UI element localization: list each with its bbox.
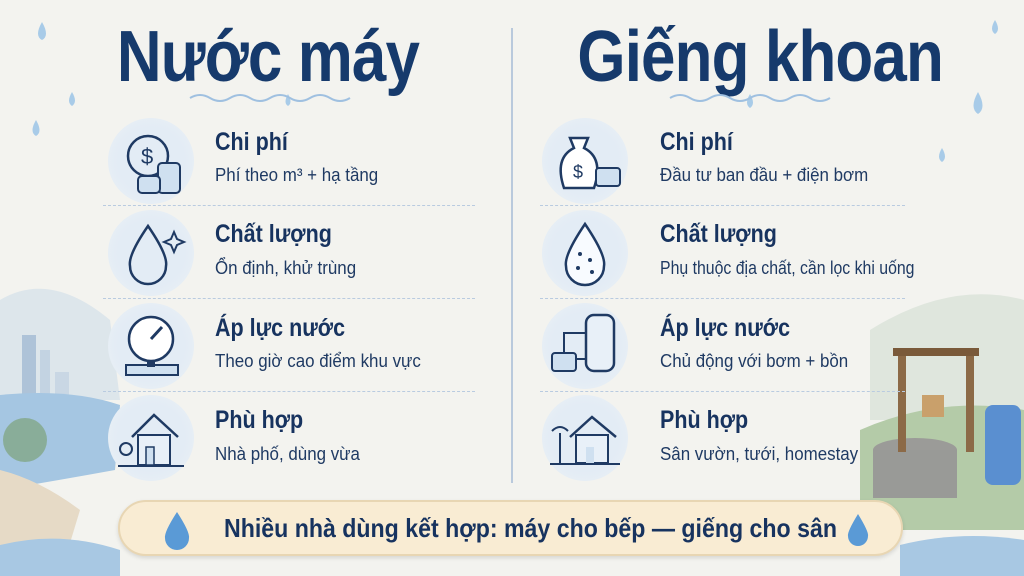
panel: Giếng khoan (542, 118, 914, 481)
text: Chất lượng: Chất lượng (660, 220, 777, 248)
text: Chi phí: Chi phí (660, 128, 733, 156)
title: Giếng khoan: Giếng khoan (577, 17, 943, 97)
panel: Nước máy: Nhà phố, dùng vừa (215, 444, 360, 464)
panel: Giếng khoan: Phụ thuộc địa chất, cần lọc khi uống (660, 258, 914, 278)
text: Áp lực nước: Áp lực nước (215, 314, 345, 342)
icon: gauge (108, 303, 194, 389)
panel: Nước máy (108, 118, 421, 481)
banner text: Nhiều nhà dùng kết hợp: máy cho bếp — giếng cho sân (224, 513, 837, 543)
icon: money bag + pump (542, 118, 628, 204)
icon: coins: $ (141, 144, 153, 169)
icon: pump + tank (542, 303, 628, 389)
text: Chi phí: Chi phí (215, 128, 288, 156)
icon: drop with particles (542, 210, 628, 296)
panel: Giếng khoan: Chủ động với bơm + bồn (660, 351, 848, 371)
text: Phù hợp: Phù hợp (215, 406, 303, 434)
panel: Nước máy: Phí theo m³ + hạ tầng (215, 165, 378, 185)
callout banner (118, 500, 903, 556)
icon: house with palm (542, 395, 628, 481)
icon: coins (108, 118, 194, 204)
text: Áp lực nước: Áp lực nước (660, 314, 790, 342)
panel: Nước máy: Ổn định, khử trùng (215, 258, 356, 278)
title: Nước máy: Nước máy (117, 17, 419, 97)
panel: Nước máy: Theo giờ cao điểm khu vực (215, 351, 421, 371)
icon: drop (108, 210, 194, 296)
icon: drop left (164, 512, 190, 550)
text: Chất lượng: Chất lượng (215, 220, 332, 248)
text: Phù hợp: Phù hợp (660, 406, 748, 434)
panel: Giếng khoan: Sân vườn, tưới, homestay (660, 444, 858, 464)
icon: drop right (848, 514, 868, 546)
icon: house (108, 395, 194, 481)
panel: Giếng khoan: Đầu tư ban đầu + điện bơm (660, 165, 868, 185)
icon: money bag + pump: $ (573, 162, 583, 182)
